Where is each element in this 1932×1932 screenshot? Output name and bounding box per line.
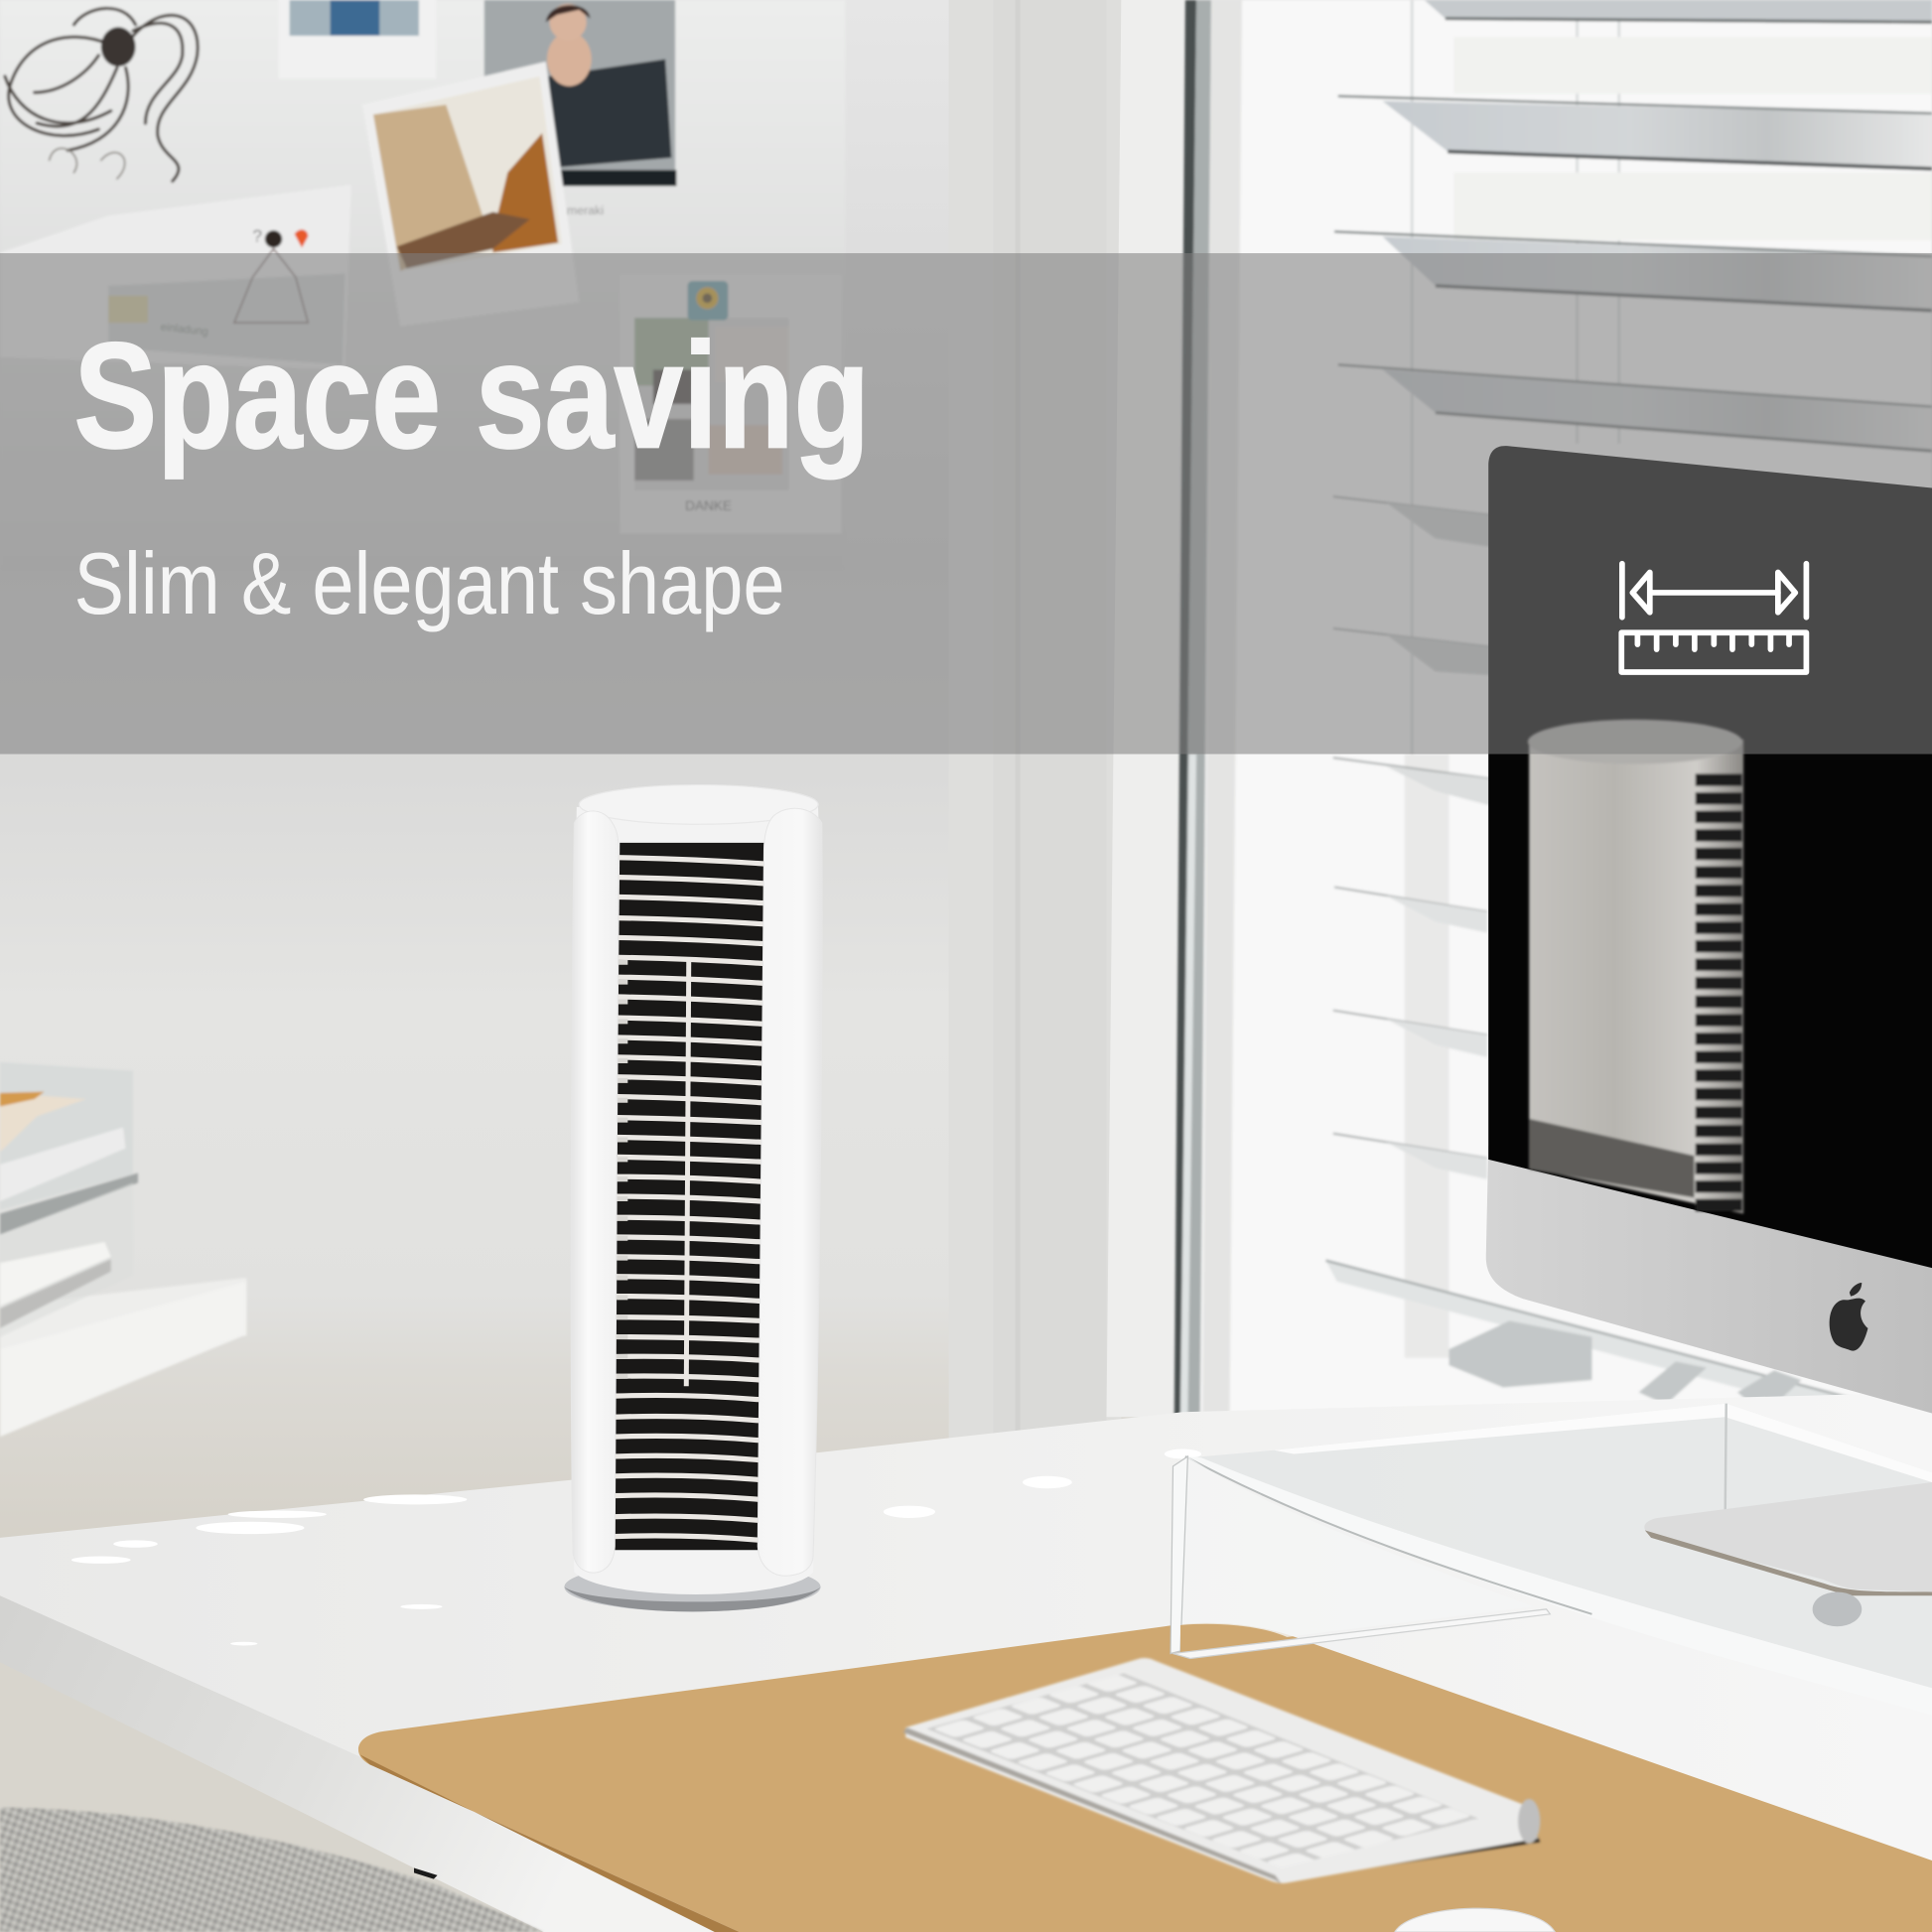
caption: meraki: meraki <box>567 204 604 217</box>
left shelf with books <box>0 1062 246 1437</box>
keyboard end cap <box>1518 1799 1540 1844</box>
grey translucent banner <box>0 253 1932 755</box>
illustrated invitation card: ? <box>252 225 262 245</box>
fan grille <box>614 843 763 1550</box>
acrylic box <box>0 1062 133 1210</box>
illustrated invitation card: einladung <box>160 322 208 339</box>
stand foot <box>1173 1609 1550 1658</box>
keyboard body <box>905 1658 1538 1883</box>
desk top <box>0 1392 1932 1932</box>
fan top cap <box>579 785 818 824</box>
monitor chin <box>1486 1146 1932 1414</box>
building postcard <box>362 62 579 327</box>
poster board with photos <box>0 0 845 572</box>
fan reflection in screen <box>1528 720 1743 1213</box>
window pane <box>1197 0 1932 1453</box>
subheading: Slim & elegant shape: Slim & elegant shape <box>73 534 785 632</box>
baby in bathtub photo <box>484 0 676 186</box>
stand leg <box>1173 1456 1534 1651</box>
stacked books <box>0 1093 86 1152</box>
thank-you photo card <box>620 275 842 533</box>
right fan panel <box>758 808 822 1576</box>
blind slats <box>1325 0 1932 1440</box>
desk <box>0 1392 1932 1932</box>
desk front face <box>0 1595 763 1932</box>
polaroid top <box>278 0 436 78</box>
grille left fins <box>618 960 626 1386</box>
window light spots <box>71 1449 1201 1645</box>
heading: Space saving: Space saving <box>73 313 870 481</box>
blind shadows under monitor <box>1449 1320 1897 1436</box>
stand front edge <box>1185 1456 1932 1716</box>
floor below desk <box>0 1651 617 1932</box>
monitor stand foot <box>1644 1482 1932 1626</box>
fan body <box>572 807 820 1594</box>
monitor <box>1486 446 1932 1414</box>
monitor screen <box>1488 446 1932 1268</box>
cork desk mat <box>358 1623 1932 1932</box>
icon: width ruler <box>1621 564 1806 672</box>
tower fan <box>564 785 822 1611</box>
window frame and glass <box>1174 0 1196 1417</box>
glowing panes <box>1453 37 1932 240</box>
left fan panel <box>571 811 619 1573</box>
illustrated invitation card <box>0 185 351 369</box>
keyboard keys <box>926 1673 1478 1867</box>
thank-you photo card: DANKE <box>685 498 732 513</box>
keyboard <box>903 1658 1540 1884</box>
acrylic monitor stand <box>1171 1404 1932 1716</box>
desk leg bracket <box>414 1867 438 1879</box>
blind frame and ladder cords <box>1412 0 1619 1232</box>
shelf top <box>0 1278 246 1378</box>
apple logo <box>1830 1283 1867 1351</box>
keyboard shadow <box>1282 1814 1540 1881</box>
grille vertical rib <box>686 960 689 1386</box>
octopus print <box>5 8 198 181</box>
window with blinds <box>1174 0 1932 1453</box>
chair back <box>0 1808 543 1932</box>
coffee mug rim <box>1395 1908 1555 1932</box>
caption: Octopus: Octopus <box>95 233 146 248</box>
board panel <box>0 0 845 572</box>
grille slats <box>614 858 763 1540</box>
fan base <box>564 1563 821 1611</box>
stand top surface <box>1190 1404 1932 1704</box>
plaster sill <box>1202 0 1242 1417</box>
shelf front <box>0 1282 246 1437</box>
cork seen through the leg <box>1180 1624 1293 1654</box>
stand back rim <box>1274 1404 1932 1482</box>
